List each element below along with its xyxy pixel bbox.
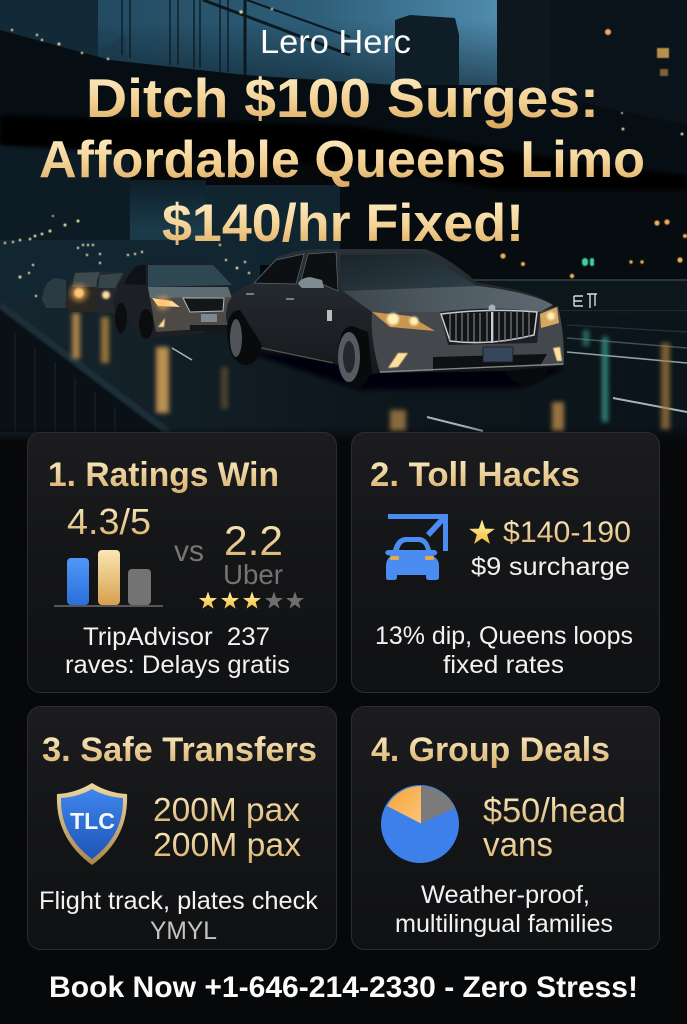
far front wheel [505,366,550,385]
price per head: vans [483,826,553,864]
skyline buildings [0,0,687,300]
distant cars [42,271,123,313]
main limo [226,249,566,390]
body text: Flight track, plates check [39,887,318,915]
body text: Weather-proof, [421,881,590,909]
car body [226,249,564,376]
Uber rating: 2.2 [224,517,283,564]
price per head [483,792,626,864]
road light reflections [72,313,670,432]
bumper lip [380,364,563,372]
icon: TLC shield: TLC [70,808,115,834]
icon: car with arrow [385,514,448,580]
Uber label: Uber [223,559,283,590]
second limo [113,263,232,339]
side mirror [298,277,324,288]
brand name: Lero Herc [260,23,411,60]
body text: 13% dip, Queens loops [375,622,633,650]
fade into panels [0,426,687,442]
sky [90,0,500,140]
door handle and marker [246,293,332,321]
body text: TripAdvisor 237 [83,623,270,651]
panel background [28,432,336,692]
hood [343,286,553,312]
body text [395,881,613,938]
star rating [199,592,304,609]
body text [375,622,633,679]
versus label: vs [174,535,204,568]
price range: $140-190 [503,516,631,549]
passenger stats: 200M pax [153,826,301,863]
headlights [372,312,435,331]
heading: 1. Ratings Win [48,456,279,494]
wet road [0,300,687,440]
license plate [483,347,513,362]
title: Affordable Queens Limo [39,131,645,189]
call to action: Book Now +1-646-214-2330 - Zero Stress! [49,971,638,1004]
bridge deck [0,30,687,180]
body text: multilingual families [395,910,613,938]
heading: 2. Toll Hacks [370,456,580,494]
body text [65,623,290,679]
city lights [4,8,683,297]
bar chart [54,550,163,607]
title: Ditch $100 Surges: [86,67,599,129]
rating value: 4.3/5 [67,501,151,542]
lower intake [433,354,547,371]
lane markings [172,325,687,431]
panel 2: toll hacks [352,432,660,692]
icon: TLC shield [57,783,127,865]
sill line [257,347,333,363]
grille [441,304,537,343]
panel background [352,432,660,692]
car shadow [240,350,566,390]
body text: fixed rates [443,651,564,679]
side windows [254,252,338,291]
passenger stats [153,791,301,863]
price per head: $50/head [483,792,626,830]
windshield [340,254,478,291]
green traffic light [582,258,594,266]
fog lights [388,353,408,368]
body text: raves: Delays gratis [65,651,290,679]
heading: 4. Group Deals [371,731,610,769]
black band behind title [0,115,687,190]
bridge cables and tower [122,0,350,78]
title: $140/hr Fixed! [162,194,524,253]
front bumper [372,306,564,373]
right side barrier [440,280,687,322]
left fence [0,305,165,432]
panel 1: ratings win [28,432,336,692]
YMYL label: YMYL [150,917,217,945]
pie chart [381,785,459,863]
wheels [338,326,372,390]
heading: 3. Safe Transfers [42,731,317,769]
title [39,67,645,253]
panel 4: group deals [352,706,660,950]
panel background [352,706,660,950]
surcharge: $9 surcharge [471,553,630,581]
panel 3: safe transfers [28,706,336,950]
road sign [574,294,597,308]
passenger stats: 200M pax [153,791,300,828]
panel background [28,706,336,950]
hero photo: rainy bridge scene [0,0,687,450]
icon: star [469,520,495,544]
